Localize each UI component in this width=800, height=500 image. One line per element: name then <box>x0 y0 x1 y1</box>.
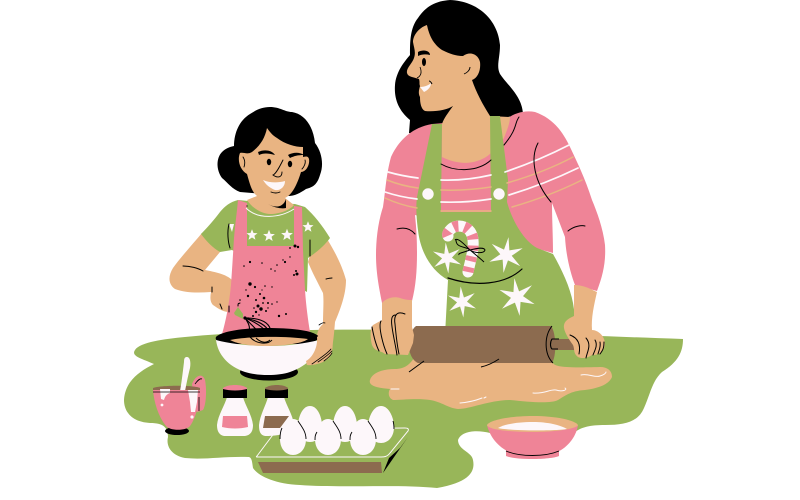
apron buttons <box>422 188 505 200</box>
girl's hand on bowl <box>306 323 333 365</box>
mixing bowl <box>216 328 320 380</box>
woman's hands <box>371 285 605 358</box>
arm lines <box>183 224 332 312</box>
shirt stars and collar <box>229 208 314 241</box>
brown spice jar <box>259 385 294 436</box>
sweater stripes <box>385 145 582 211</box>
bow on candy cane <box>455 239 485 262</box>
egg tray <box>256 406 408 473</box>
pink apron <box>222 200 310 334</box>
apron speckles <box>239 205 299 319</box>
girl <box>169 107 346 365</box>
hair <box>218 107 322 196</box>
neck and face <box>407 25 510 163</box>
arms <box>169 233 239 312</box>
whisk <box>234 307 272 344</box>
rolling pin <box>409 326 577 372</box>
pink cup with spoon <box>153 357 206 435</box>
table: green surface <box>124 330 683 488</box>
neck and face <box>239 128 309 214</box>
candy cane <box>448 226 473 272</box>
woman <box>376 0 605 335</box>
line details <box>397 117 585 283</box>
neck shadow <box>268 199 286 208</box>
whisk in batter <box>250 337 272 343</box>
eggs <box>280 406 394 455</box>
pink bowl with flour <box>487 416 578 459</box>
face details <box>243 150 305 193</box>
sweater <box>376 111 605 303</box>
apron <box>416 116 578 335</box>
hair front accent <box>427 8 470 56</box>
apron stars <box>432 235 536 319</box>
green shirt <box>201 200 330 292</box>
pink spice jar <box>217 385 253 436</box>
dough <box>370 358 612 409</box>
hair back <box>395 0 523 135</box>
dough highlights <box>391 372 606 403</box>
face details <box>417 51 470 92</box>
